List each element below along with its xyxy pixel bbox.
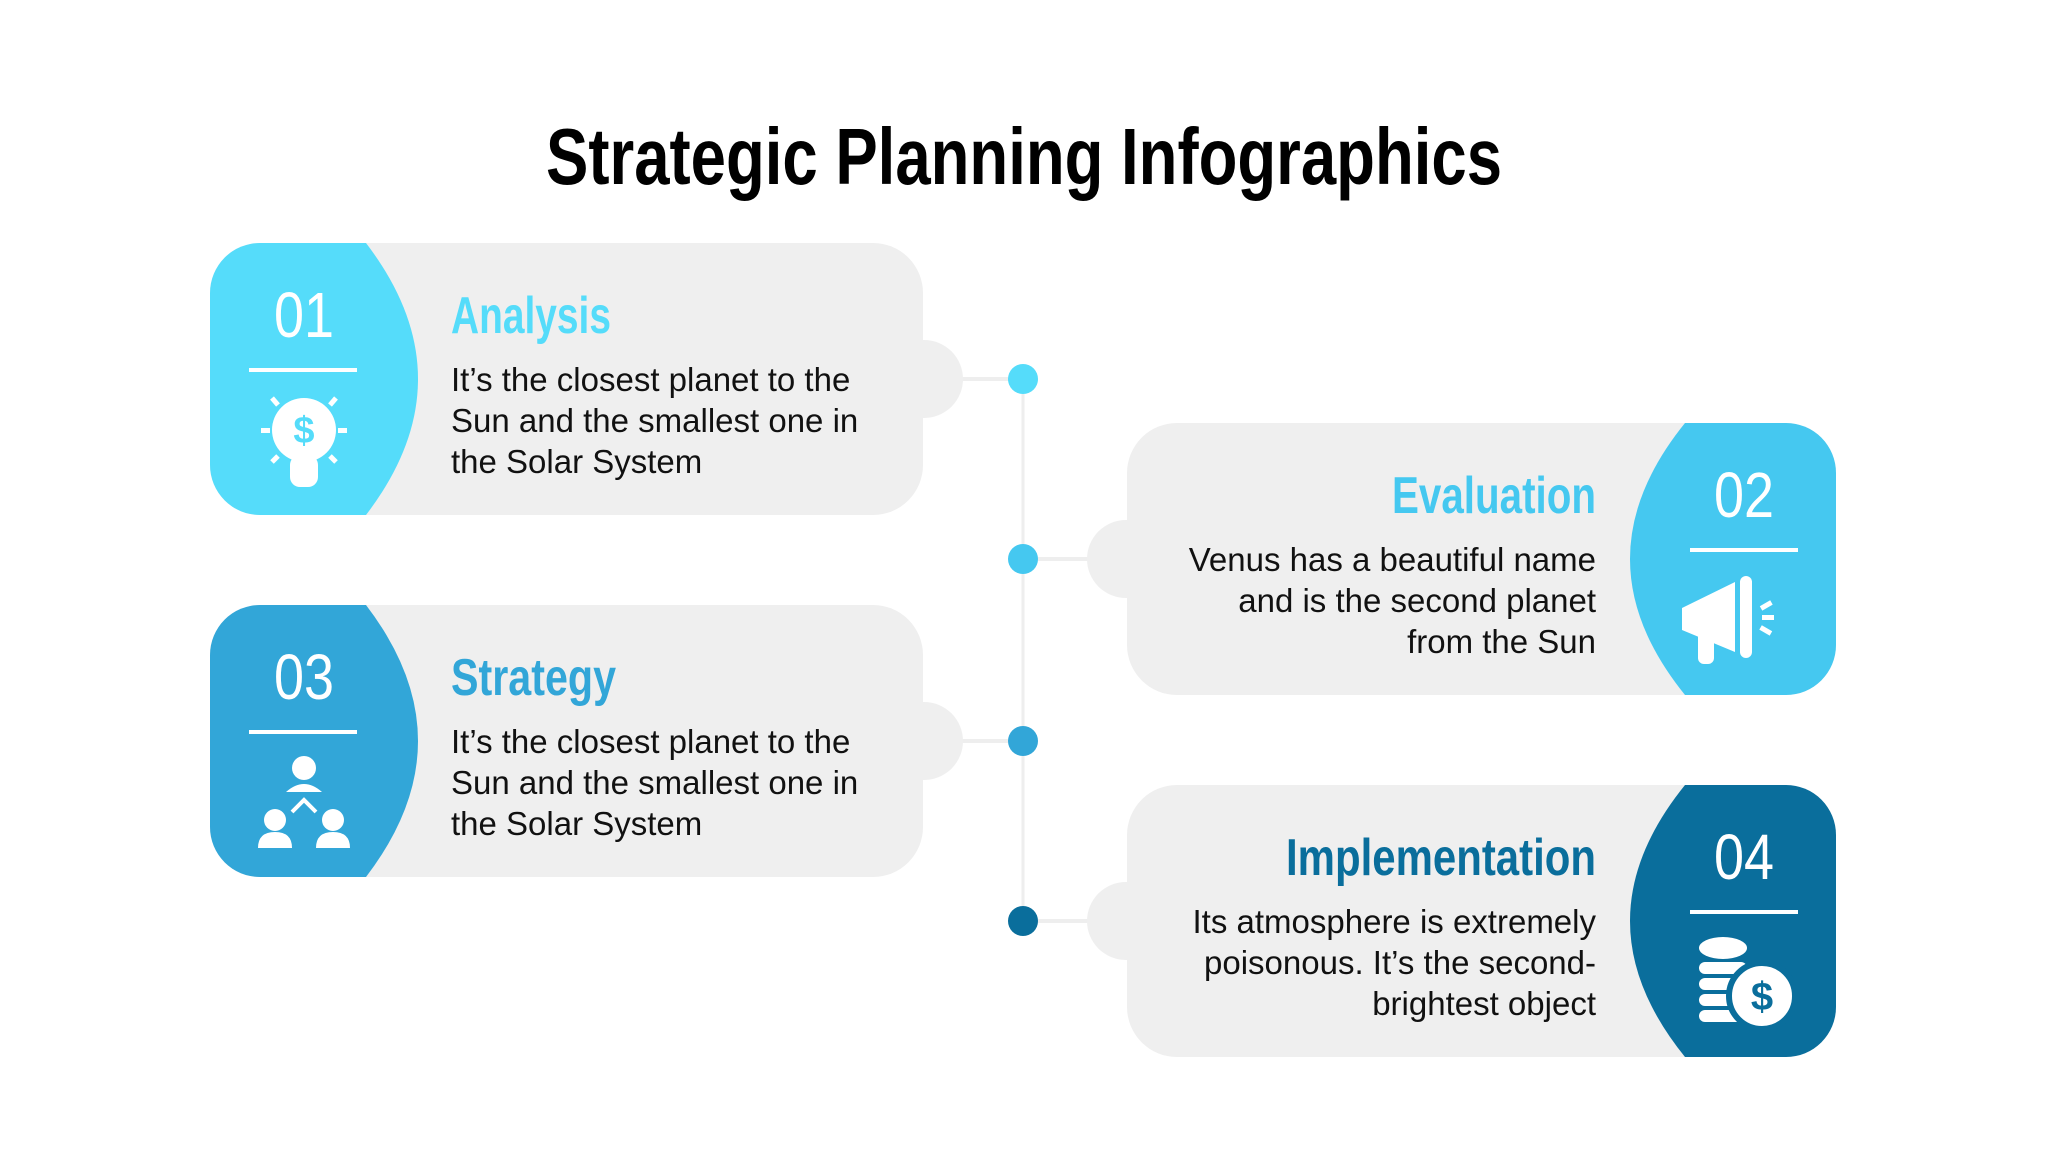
panel: 04 implementation: Implementation <box>1286 829 1596 887</box>
panel: 04 implementation: 04 <box>1714 821 1774 893</box>
panel: 03 strategy: 03 <box>274 641 334 713</box>
panel: 02 evaluation: from the Sun <box>1407 623 1596 660</box>
panel: 01 analysis <box>200 243 963 515</box>
panel: 02 evaluation: 02 <box>1714 459 1774 531</box>
timeline connector <box>960 379 1090 921</box>
panel: 04 implementation: Its atmosphere is extremely <box>1193 903 1596 940</box>
panel: 01 analysis: Sun and the smallest one in <box>451 402 858 439</box>
icon: megaphone <box>1682 576 1774 664</box>
panel: 01 analysis: It’s the closest planet to the <box>451 361 850 398</box>
panel: 04 implementation: poisonous. It’s the second- <box>1204 944 1596 981</box>
dot 1 <box>1008 364 1038 394</box>
panel: 04 implementation <box>1087 785 1846 1057</box>
icon: coins: $ <box>1751 975 1773 1019</box>
panel: 03 strategy <box>200 605 963 877</box>
panel: 02 evaluation: Venus has a beautiful name <box>1189 541 1596 578</box>
panel: 02 evaluation: Evaluation <box>1392 467 1596 525</box>
panel: 03 strategy: the Solar System <box>451 805 702 842</box>
title: Strategic Planning Infographics <box>546 112 1502 201</box>
icon: team hierarchy <box>258 756 350 848</box>
panel: 03 strategy: Strategy <box>451 649 616 707</box>
icon: coins <box>1699 937 1795 1029</box>
icon: lightbulb dollar: $ <box>293 410 315 452</box>
panel: 02 evaluation <box>1087 423 1846 695</box>
panel: 01 analysis: the Solar System <box>451 443 702 480</box>
panel: 03 strategy: It’s the closest planet to the <box>451 723 850 760</box>
panel: 01 analysis: Analysis <box>451 287 611 345</box>
panel: 02 evaluation: and is the second planet <box>1238 582 1596 619</box>
panel: 04 implementation: brightest object <box>1372 985 1596 1022</box>
dot 4 <box>1008 906 1038 936</box>
dot 2 <box>1008 544 1038 574</box>
panel: 03 strategy: Sun and the smallest one in <box>451 764 858 801</box>
panel: 01 analysis: 01 <box>274 279 334 351</box>
icon: lightbulb dollar <box>261 398 347 487</box>
dot 3 <box>1008 726 1038 756</box>
